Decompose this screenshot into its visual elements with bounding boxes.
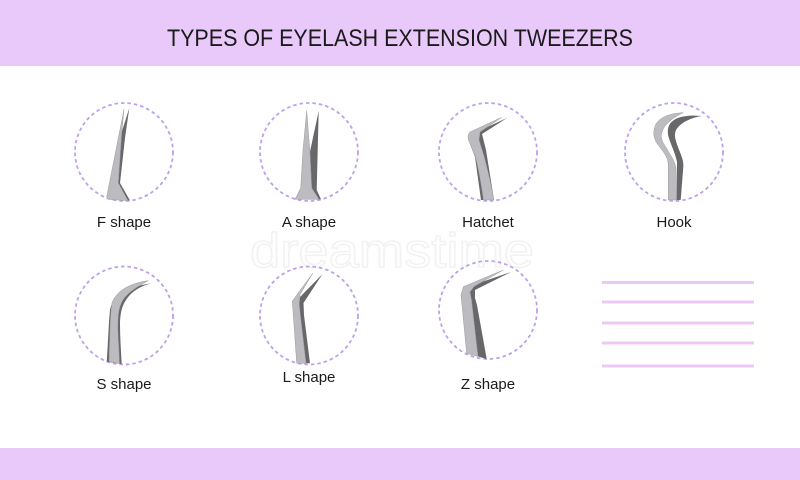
A shape tweezer — [260, 103, 358, 231]
S shape tweezer: S shape — [96, 376, 152, 393]
A shape tweezer: A shape — [282, 214, 336, 231]
S shape tweezer — [75, 266, 173, 393]
Z shape tweezer: Z shape — [461, 376, 515, 393]
L shape tweezer — [260, 266, 358, 386]
note lines — [602, 282, 754, 366]
L shape tweezer: L shape — [283, 369, 335, 386]
Z shape tweezer — [439, 261, 537, 393]
top banner — [0, 0, 800, 66]
Hatchet tweezer: Hatchet — [462, 214, 515, 231]
F shape tweezer: F shape — [97, 214, 151, 231]
Hatchet tweezer — [439, 103, 537, 231]
F shape tweezer — [75, 103, 173, 231]
bottom banner — [0, 448, 800, 480]
Hook tweezer: Hook — [656, 214, 692, 231]
title: TYPES OF EYELASH EXTENSION TWEEZERS — [167, 25, 633, 52]
watermark: dreamstime — [250, 225, 534, 278]
Hook tweezer — [625, 103, 723, 231]
